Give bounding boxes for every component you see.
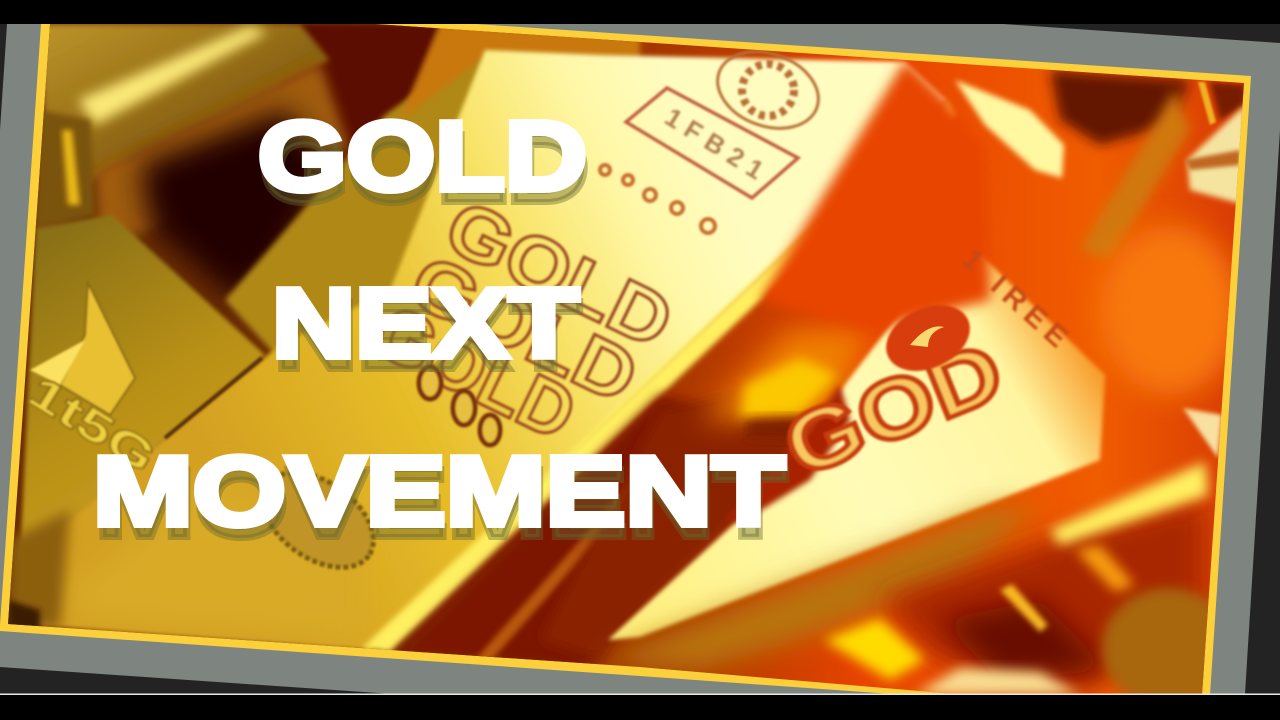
title shadow	[95, 113, 787, 558]
bottom cream	[915, 668, 1080, 695]
bottom white line	[0, 694, 1280, 695]
large gold bar	[30, 50, 946, 650]
left sliver	[35, 110, 95, 230]
orange-brown strip	[1080, 90, 1190, 260]
round seal stamp	[714, 50, 822, 132]
right bar cream	[608, 235, 1105, 640]
title: MOVEMENT: MOVEMENT	[93, 436, 785, 546]
left bar	[20, 215, 265, 560]
left chevron emblem	[30, 283, 135, 415]
right cream triangle	[1183, 408, 1222, 458]
maroon band	[391, 386, 693, 664]
orange lower centre	[546, 392, 798, 655]
red stamp edge	[725, 385, 850, 520]
stamped numbers	[419, 367, 500, 445]
rectangle stamp	[626, 88, 798, 198]
yellow reflection	[740, 358, 838, 420]
stamped gold words: GOLD	[363, 289, 589, 457]
top left bar	[44, 24, 332, 180]
bar side face	[223, 58, 483, 353]
bar bright edge	[362, 100, 955, 652]
big orange glow	[1100, 225, 1240, 395]
lower left corner shade	[8, 510, 70, 628]
gold knob	[1095, 582, 1208, 694]
emblem highlight	[910, 326, 944, 347]
dark top right	[1050, 70, 1190, 145]
title shadow: MOVEMENT	[95, 448, 787, 558]
small dots	[600, 165, 715, 233]
lower bar shading	[85, 490, 346, 647]
stamped gold words: GOLD	[433, 184, 686, 365]
title text	[93, 101, 787, 558]
title: GOLD: GOLD	[258, 101, 587, 211]
right bright streak	[1050, 462, 1208, 545]
title shadow: NEXT	[274, 280, 581, 390]
left stamped letters: 1t5G	[20, 367, 164, 483]
orange streak	[1075, 545, 1135, 592]
yellow glow	[700, 330, 870, 420]
stamped gold words: GOLD	[398, 239, 651, 420]
second bar brown	[95, 62, 350, 240]
deep red lower right	[880, 500, 1205, 690]
top letterbox	[0, 0, 1280, 24]
right bar lower face	[600, 505, 1040, 670]
cream sliver	[1187, 105, 1245, 205]
left bar dark edge	[165, 358, 262, 438]
rectangle stamp: 1FB21	[660, 102, 769, 185]
dark gap top	[300, 24, 440, 159]
title shadow: GOLD	[260, 113, 589, 223]
right stamped gold: GOD	[772, 323, 1015, 495]
top left highlight	[78, 26, 268, 125]
yellow streak	[1000, 584, 1048, 632]
stamped gold words	[363, 184, 686, 457]
thin gold line	[1198, 82, 1216, 125]
small text right bar: 1 IREE	[955, 243, 1074, 354]
dark centre gap	[140, 110, 330, 300]
title: NEXT: NEXT	[272, 268, 579, 378]
red emblem	[875, 292, 981, 384]
lower bar emblem	[245, 453, 391, 587]
top strip	[400, 24, 640, 120]
yellow window reflection	[824, 618, 925, 680]
red band top right	[760, 60, 990, 330]
flame highlight	[955, 80, 1064, 178]
bottom letterbox	[0, 695, 1280, 720]
